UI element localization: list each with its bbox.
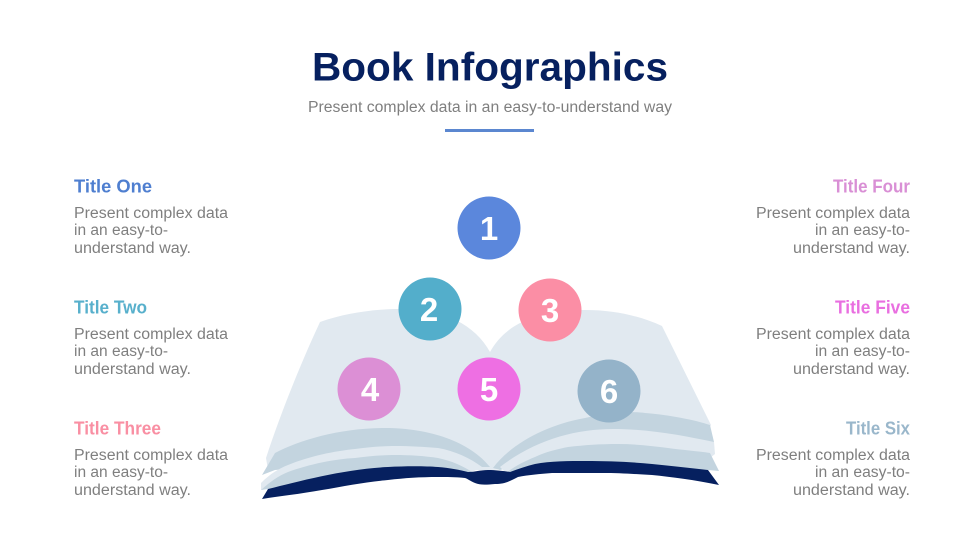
text block: title five: [756, 298, 910, 378]
number circle 3: [518, 278, 582, 342]
number circle 1: 1: [480, 210, 498, 247]
illustration: open book: [261, 309, 719, 499]
text block: title three: in an easy-to-: [74, 464, 168, 481]
number circle 4: 4: [361, 371, 380, 408]
number circle 6: [578, 360, 640, 422]
text block: title two: Present complex data: [74, 326, 228, 343]
right upper sheet: [493, 412, 714, 470]
text block: title one: Title One: [74, 176, 152, 196]
text block: title four: in an easy-to-: [815, 222, 910, 239]
number circle 6: 6: [600, 373, 618, 410]
subtitle: Present complex data in an easy-to-understand way: [308, 99, 672, 116]
text block: title two: in an easy-to-: [74, 343, 168, 360]
text block: title four: Title Four: [833, 176, 910, 196]
right page: [490, 310, 711, 470]
text block: title three: Present complex data: [74, 447, 228, 464]
right lower sheet: [506, 444, 719, 473]
text block: title two: Title Two: [74, 298, 147, 318]
right light sheet: [500, 429, 715, 473]
text block: title two: understand way.: [74, 361, 191, 378]
text block: title six: [756, 418, 910, 499]
text block: title three: Title Three: [74, 418, 161, 438]
text block: title five: understand way.: [793, 361, 910, 378]
text block: title five: Title Five: [835, 298, 910, 318]
text block: title five: in an easy-to-: [815, 343, 910, 360]
text block: title six: Title Six: [846, 418, 910, 438]
number circle 4: [338, 358, 400, 420]
text block: title one: in an easy-to-: [74, 222, 168, 239]
left upper sheet: [262, 428, 490, 475]
text block: title one: Present complex data: [74, 205, 228, 222]
text block: title three: understand way.: [74, 482, 191, 499]
title underline: [445, 129, 534, 132]
text block: title four: [756, 176, 910, 257]
number circle 1: [458, 196, 520, 260]
left light sheet: [261, 446, 482, 490]
number circle 5: 5: [480, 371, 498, 408]
text block: title one: understand way.: [74, 240, 191, 257]
text block: title three: [74, 418, 228, 499]
text block: title two: [74, 298, 228, 378]
text block: title four: understand way.: [793, 240, 910, 257]
text block: title four: Present complex data: [756, 205, 910, 222]
text block: title six: understand way.: [793, 482, 910, 499]
left page: [266, 309, 490, 470]
text block: title one: [74, 176, 228, 257]
text block: title six: Present complex data: [756, 447, 910, 464]
navy cover and spine: [262, 461, 719, 499]
number circle 2: [398, 278, 462, 340]
left lower sheet: [261, 455, 472, 490]
text block: title five: Present complex data: [756, 326, 910, 343]
text block: title six: in an easy-to-: [815, 464, 910, 481]
number circle 3: 3: [541, 292, 559, 329]
number circle 5: [458, 358, 520, 420]
title: Book Infographics: [312, 46, 668, 90]
number circle 2: 2: [420, 291, 438, 328]
